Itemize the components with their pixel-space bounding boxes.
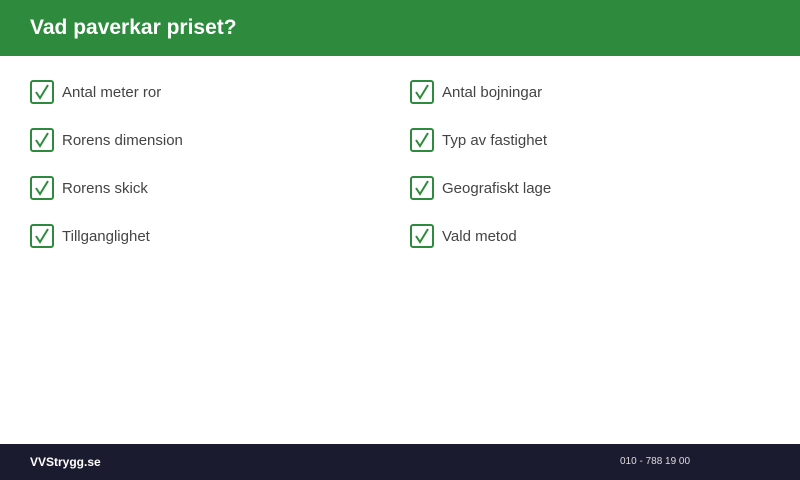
phone: 010 - 788 19 00 <box>620 456 690 467</box>
item: Geografiskt lage <box>410 176 551 200</box>
item: Tillganglighet: Tillganglighet <box>62 228 150 245</box>
item: Vald metod <box>410 224 517 248</box>
brand: VVStrygg.se <box>30 455 101 469</box>
header <box>0 0 800 56</box>
item: Antal meter ror <box>30 80 161 104</box>
item: Antal bojningar: Antal bojningar <box>442 84 542 101</box>
footer <box>0 444 800 480</box>
item: Vald metod: Vald metod <box>442 228 517 245</box>
title: Vad paverkar priset? <box>30 16 237 39</box>
checklist <box>30 80 551 248</box>
item: Typ av fastighet <box>410 128 547 152</box>
item: Tillganglighet <box>30 224 150 248</box>
item: Rorens skick: Rorens skick <box>62 180 148 197</box>
item: Rorens dimension <box>30 128 183 152</box>
item: Antal meter ror: Antal meter ror <box>62 84 161 101</box>
item: Typ av fastighet: Typ av fastighet <box>442 132 547 149</box>
item: Rorens skick <box>30 176 148 200</box>
item: Antal bojningar <box>410 80 542 104</box>
item: Rorens dimension: Rorens dimension <box>62 132 183 149</box>
item: Geografiskt lage: Geografiskt lage <box>442 180 551 197</box>
